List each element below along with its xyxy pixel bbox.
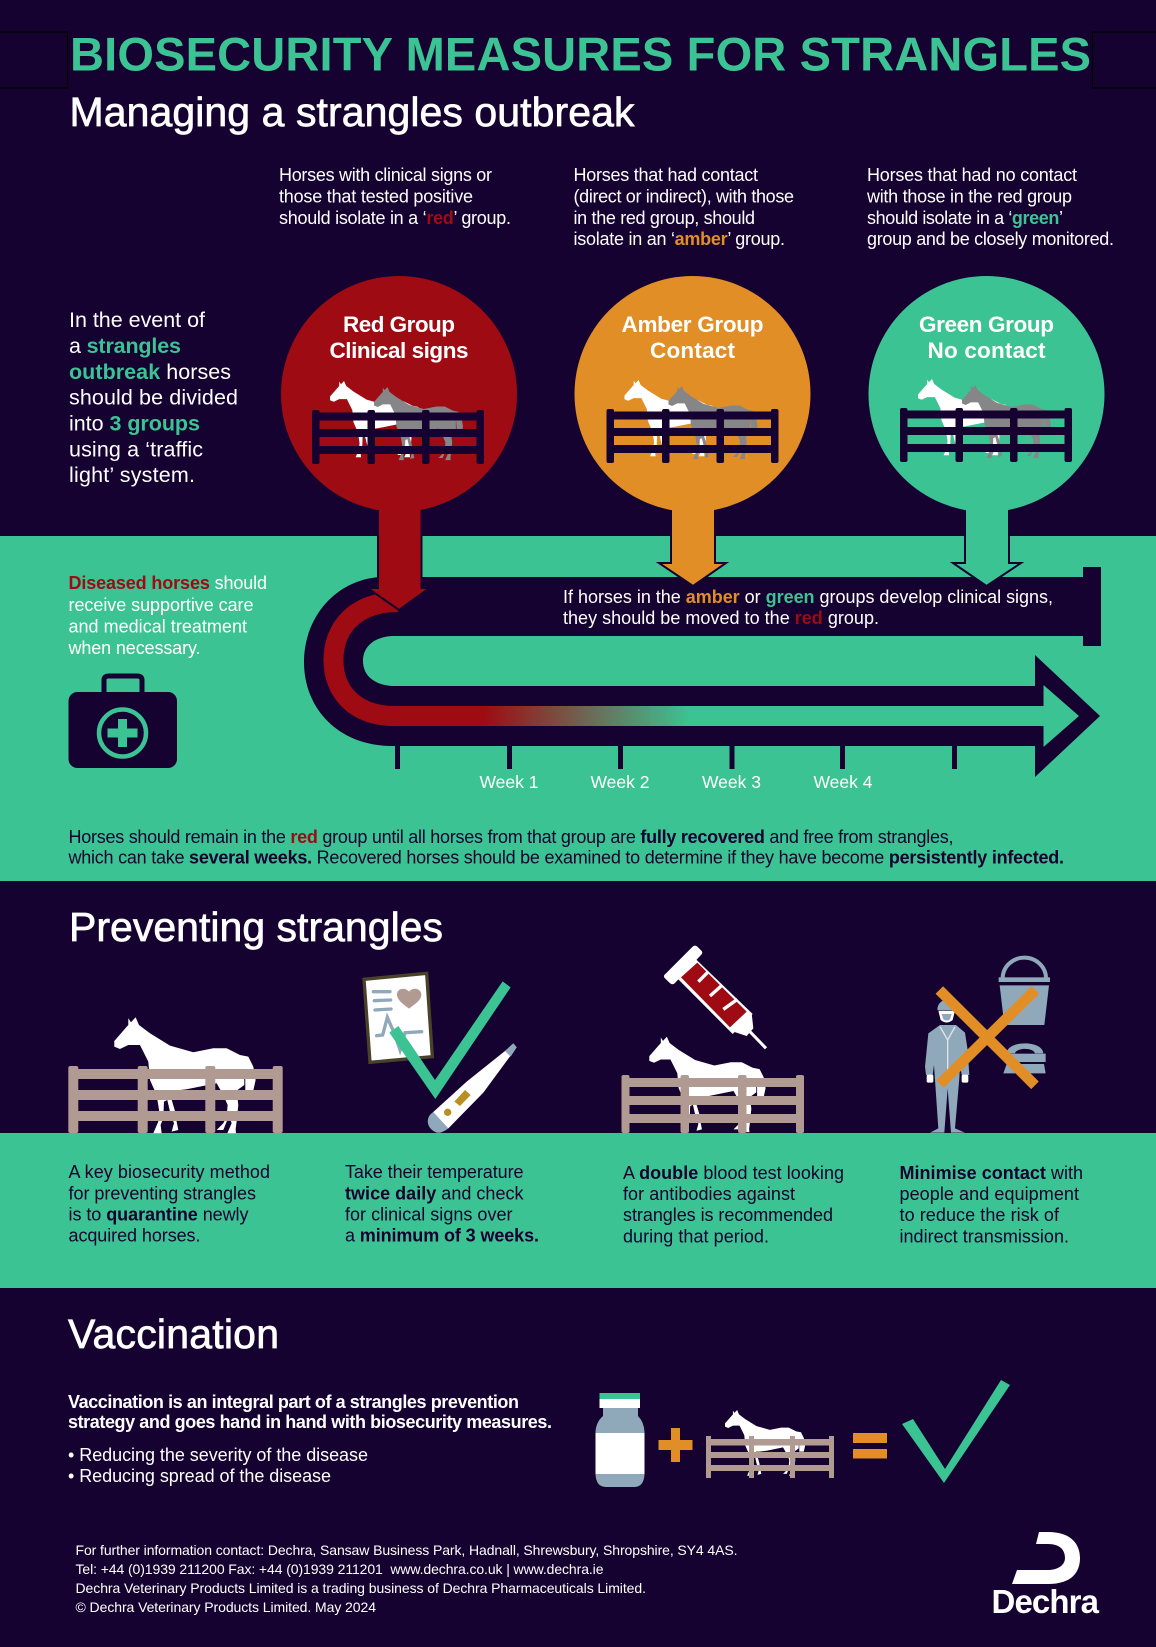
icon: first aid kit	[68, 676, 177, 768]
footer contact text: Tel: +44 (0)1939 211200 Fax: +44 (0)1939 211201 www.dechra.co.uk | www.dechra.ie	[76, 1561, 604, 1577]
heading: managing an outbreak: Managing a strangles outbreak	[70, 89, 635, 135]
text: minimise contact: to reduce the risk of	[900, 1205, 1060, 1225]
text: remain in red group: which can take several weeks. Recovered horses should be examined to determine if they have become persistently infected.	[68, 848, 1064, 868]
intro text: traffic light system: should be divided	[69, 386, 238, 410]
text: quarantine: acquired horses.	[68, 1226, 200, 1246]
text: remain in red group: Horses should remain in the red group until all horses from that group are fully recovered and free from strangles,	[68, 827, 954, 847]
text: amber group description	[574, 165, 794, 249]
text: minimise contact: people and equipment	[900, 1184, 1079, 1204]
intro text: traffic light system: using a ‘traffic	[69, 438, 203, 462]
text: red group description: Horses with clinical signs or	[279, 165, 492, 185]
text: vaccination intro: Vaccination is an integral part of a strangles prevention	[68, 1392, 519, 1412]
timeline week labels: Week 1	[479, 772, 539, 792]
text: vaccination intro: strategy and goes hand in hand with biosecurity measures.	[68, 1412, 552, 1432]
text: amber group description: isolate in an ‘amber’ group.	[574, 229, 785, 249]
timeline week labels: Week 2	[590, 772, 650, 792]
timeline week labels: Week 3	[702, 772, 761, 792]
text: move to red group	[563, 587, 1053, 628]
intro text: traffic light system: into 3 groups	[69, 412, 200, 436]
icon: plus	[658, 1428, 692, 1462]
icon: horse behind fence (quarantine)	[68, 1017, 283, 1133]
text: quarantine: for preventing strangles	[68, 1184, 256, 1204]
text: blood test: A double blood test looking	[623, 1163, 844, 1183]
amber group circle and arrow: Contact	[650, 338, 736, 363]
intro text: traffic light system: a strangles	[69, 334, 181, 358]
text: diseased horses: when necessary.	[68, 638, 200, 658]
title: BIOSECURITY MEASURES FOR STRANGLES	[70, 28, 1091, 80]
footer contact text	[76, 1542, 738, 1615]
text: quarantine: A key biosecurity method	[68, 1162, 270, 1182]
Dechra logo	[992, 1532, 1100, 1620]
text: minimise contact: Minimise contact with	[900, 1163, 1083, 1183]
text: quarantine	[68, 1162, 270, 1246]
text: temperature: Take their temperature	[345, 1162, 524, 1182]
footer contact text: For further information contact: Dechra, Sansaw Business Park, Hadnall, Shrewsbury, Shropshire, SY4 4AS.	[76, 1542, 738, 1558]
heading: preventing strangles: Preventing strangles	[69, 904, 443, 950]
text: green group description: Horses that had no contact	[867, 165, 1077, 185]
icon: horse behind fence (vaccination)	[706, 1410, 834, 1478]
timeline week labels	[479, 772, 873, 792]
red group circle and arrow: Clinical signs	[330, 338, 468, 363]
intro text: traffic light system: light’ system.	[69, 463, 195, 487]
timeline: curved track	[304, 567, 1101, 777]
footer contact text: Dechra Veterinary Products Limited is a trading business of Dechra Pharmaceuticals Limited.	[76, 1580, 646, 1596]
text: temperature: for clinical signs over	[345, 1204, 512, 1224]
icon: check mark	[902, 1380, 1010, 1483]
text: temperature: a minimum of 3 weeks.	[345, 1226, 539, 1246]
timeline week labels: Week 4	[813, 772, 873, 792]
text: diseased horses: receive supportive care	[68, 595, 254, 615]
text: red group description	[279, 165, 511, 228]
icon: person, bucket and brush crossed out	[925, 958, 1050, 1133]
text: green group description: with those in the red group	[866, 186, 1072, 206]
green band: outbreak timeline	[0, 536, 1156, 881]
text: amber group description: in the red group, should	[574, 208, 755, 228]
text: temperature: twice daily and check	[345, 1184, 524, 1204]
intro text: traffic light system: In the event of	[69, 308, 205, 332]
intro text: traffic light system: outbreak horses	[69, 360, 231, 384]
icon: syringe and horse behind fence	[622, 946, 804, 1133]
Dechra logo: Dechra	[992, 1583, 1100, 1620]
text: diseased horses: Diseased horses should	[68, 573, 267, 593]
text: vaccination bullets	[68, 1445, 368, 1486]
amber group circle and arrow	[574, 276, 810, 586]
icon: vaccine bottle	[596, 1393, 644, 1487]
red group circle and arrow	[281, 276, 517, 610]
green group circle and arrow	[868, 276, 1104, 586]
text: vaccination bullets: • Reducing spread of the disease	[68, 1466, 331, 1486]
text: blood test	[623, 1163, 844, 1246]
text: blood test: strangles is recommended	[623, 1205, 833, 1225]
green band: prevention text	[0, 1133, 1156, 1288]
amber group circle and arrow: Amber Group	[622, 312, 764, 337]
text: green group description: should isolate in a ‘green’	[867, 208, 1063, 228]
text: blood test: during that period.	[623, 1226, 769, 1246]
text: amber group description: Horses that had contact	[574, 165, 758, 185]
text: diseased horses: and medical treatment	[68, 616, 247, 636]
text: vaccination bullets: • Reducing the severity of the disease	[68, 1445, 368, 1465]
text: minimise contact: indirect transmission.	[900, 1226, 1069, 1246]
green group circle and arrow: No contact	[928, 338, 1046, 363]
text: vaccination intro	[68, 1392, 552, 1432]
text: green group description	[866, 165, 1114, 249]
text: quarantine: is to quarantine newly	[68, 1204, 248, 1224]
text: green group description: group and be closely monitored.	[867, 229, 1114, 249]
icon: equals	[853, 1433, 887, 1458]
text: temperature	[345, 1162, 539, 1246]
text: minimise contact	[900, 1163, 1083, 1246]
text: move to red group: they should be moved to the red group.	[563, 608, 879, 628]
icon: clipboard, check mark and thermometer	[364, 973, 517, 1133]
intro text: traffic light system	[69, 308, 238, 487]
heading: vaccination: Vaccination	[68, 1311, 279, 1357]
text: red group description: those that tested positive	[279, 186, 473, 206]
timeline ticks	[395, 746, 957, 769]
text: amber group description: (direct or indirect), with those	[574, 186, 794, 206]
text: diseased horses	[68, 573, 267, 658]
text: move to red group: If horses in the amber or green groups develop clinical signs,	[563, 587, 1053, 607]
title frame marks	[0, 32, 1156, 88]
text: remain in red group	[68, 827, 1064, 868]
red group circle and arrow: Red Group	[343, 312, 455, 337]
green group circle and arrow: Green Group	[919, 312, 1054, 337]
text: red group description: should isolate in a ‘red’ group.	[279, 208, 511, 228]
footer contact text: © Dechra Veterinary Products Limited. May 2024	[76, 1599, 376, 1615]
text: blood test: for antibodies against	[623, 1184, 795, 1204]
